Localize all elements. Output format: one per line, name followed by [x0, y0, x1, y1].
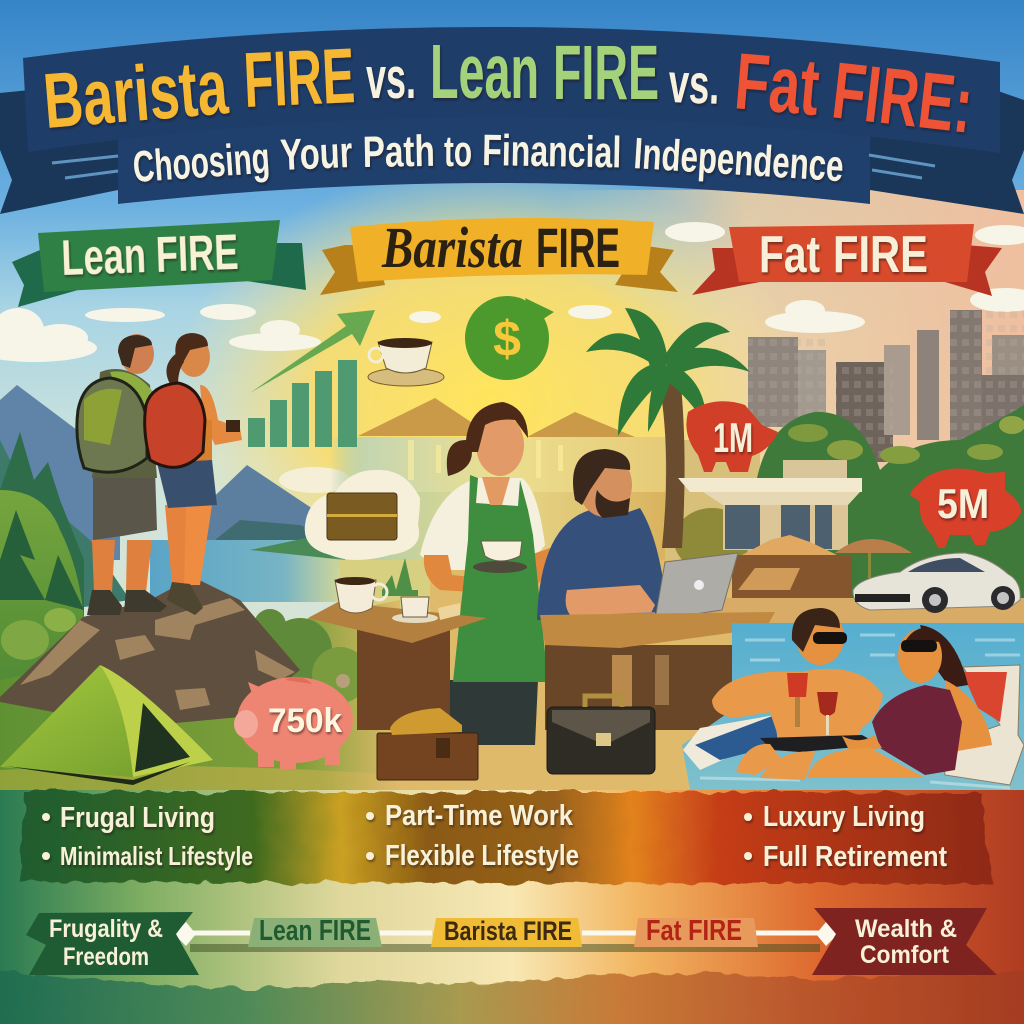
thought bubble with briefcase [305, 470, 420, 560]
spectrum end: frugality [26, 912, 199, 975]
feature list: barista: Flexible Lifestyle [385, 840, 579, 872]
city skyline [748, 310, 1024, 462]
wooden table right [540, 612, 775, 730]
piggy bank: 1M: 1M [713, 414, 753, 461]
title: FIRE [242, 31, 357, 124]
feature list: lean: Frugal Living [60, 802, 215, 834]
hiker: woman [157, 333, 242, 615]
backdrop behind building [625, 440, 760, 610]
title: Barista [40, 42, 231, 145]
subtitle: to [444, 127, 472, 176]
hiker: man [87, 334, 167, 615]
title: vs. [668, 51, 721, 116]
feature list: fat [744, 801, 947, 873]
subtitle: Path [362, 127, 435, 177]
tent [0, 665, 213, 785]
barista [420, 402, 550, 745]
title band [23, 27, 1000, 153]
drinks [787, 673, 838, 735]
spectrum end: wealth [812, 908, 997, 975]
backpack: red [145, 383, 205, 467]
growth bars [248, 360, 357, 447]
resort and water [330, 398, 665, 567]
feature list: barista: Part-Time Work [385, 800, 574, 832]
ribbon: Lean FIRE: Lean FIRE [60, 224, 239, 286]
right sky tint [560, 190, 1024, 610]
banner tails [0, 90, 1024, 214]
man with laptop [537, 449, 667, 620]
ribbon: Barista FIRE [320, 215, 678, 295]
building [678, 460, 862, 550]
spectrum end: frugality: Freedom [63, 943, 149, 971]
piggy bank: 5M [910, 469, 1021, 548]
ribbon: Barista FIRE: FIRE [536, 216, 620, 279]
title: FIRE [553, 30, 659, 116]
cabanas [732, 535, 912, 598]
spectrum bar shadow [190, 944, 820, 952]
ribbon: Barista FIRE: Barista [381, 215, 523, 280]
feature list: lean: Minimalist Lifestyle [60, 841, 253, 871]
subtitle: Your [279, 128, 353, 180]
wooden table left [308, 602, 487, 730]
piggy bank: 1M [686, 401, 778, 472]
bottom foliage [0, 972, 1024, 1024]
title: vs. [366, 46, 416, 111]
laptop [612, 553, 738, 622]
clouds [0, 222, 1024, 362]
spectrum end: frugality: Frugality & [49, 915, 163, 943]
backpack: green [77, 378, 147, 472]
woman in pool [807, 625, 992, 778]
lower background [0, 790, 1024, 1024]
spectrum end: wealth: Wealth & [855, 915, 957, 943]
black briefcase [547, 696, 655, 774]
feature list: fat: Full Retirement [763, 841, 947, 873]
subtitle dashes [52, 155, 935, 178]
left forest [0, 432, 110, 690]
car [853, 553, 1020, 613]
piggy bank: 5M: 5M [937, 480, 989, 527]
brown case [377, 708, 478, 780]
chart arrow [250, 310, 375, 393]
subtitle band [118, 100, 870, 204]
icon: coffee cup on saucer [368, 338, 444, 386]
background glow [170, 160, 810, 640]
feature list: lean [42, 802, 253, 871]
title: Fat [732, 36, 823, 132]
feature band [20, 792, 993, 884]
left bright foliage [0, 490, 84, 690]
ground [0, 560, 1024, 795]
subtitle [131, 126, 845, 192]
spectrum label: lean: Lean FIRE [259, 915, 371, 947]
subtitle: Financial [482, 126, 622, 177]
title [40, 29, 977, 150]
man in pool [712, 608, 883, 780]
icon: dollar coin: $ [493, 311, 521, 367]
piggy bank: 750k: 750k [268, 702, 342, 740]
icon: dollar coin [465, 296, 554, 380]
spectrum label: barista: Barista FIRE [444, 916, 572, 946]
ribbon: Lean FIRE [12, 220, 306, 307]
spectrum end: wealth: Comfort [860, 941, 950, 969]
left mountains and lake [0, 385, 351, 620]
feature list: fat: Luxury Living [763, 801, 925, 833]
spectrum label: fat: Fat FIRE [646, 915, 742, 947]
ribbon: Fat FIRE: Fat [759, 226, 820, 284]
piggy bank: 750k [234, 674, 353, 769]
plant [382, 558, 418, 596]
title: Lean [430, 29, 539, 115]
subtitle: Independence [632, 129, 845, 191]
icon: palm tree [586, 308, 750, 548]
spectrum line [174, 922, 838, 946]
ribbon: Fat FIRE [692, 224, 1002, 296]
feature list: barista [366, 800, 579, 872]
ribbon: Fat FIRE: FIRE [833, 226, 928, 284]
right trees [757, 405, 1024, 610]
pool scene [682, 608, 1024, 790]
rock outcrop [0, 577, 300, 727]
lounger [942, 665, 1024, 785]
coffee cups on table [335, 577, 460, 623]
subtitle: Choosing [131, 134, 271, 192]
